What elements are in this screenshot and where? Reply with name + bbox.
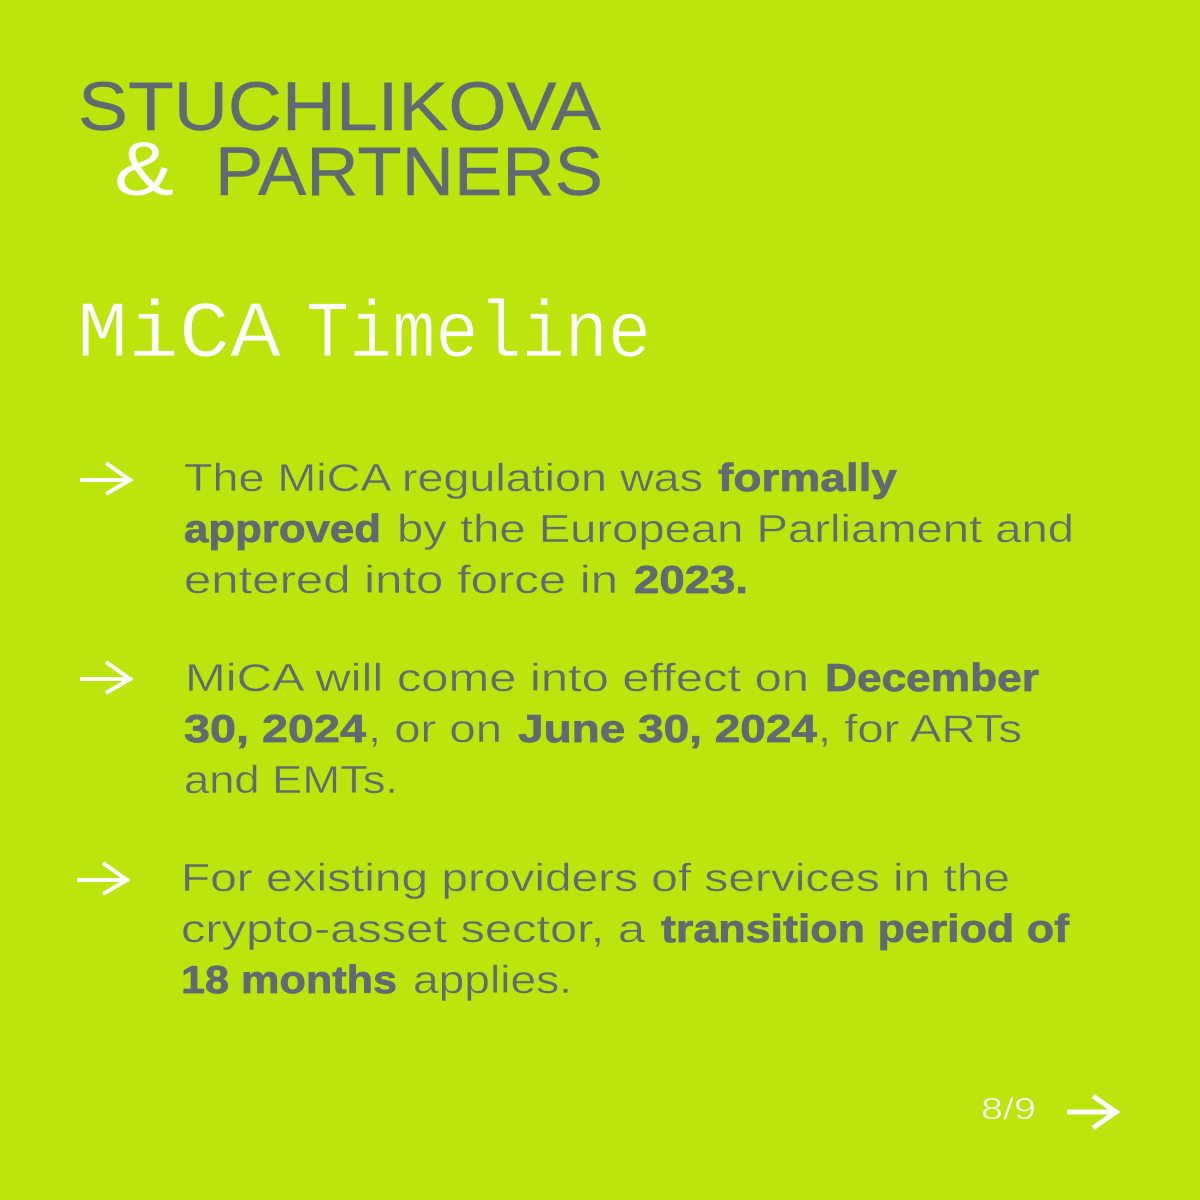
text block: transition period: crypto-asset sector, a <box>181 908 645 951</box>
logo word: Partners: PARTNERS <box>215 133 603 210</box>
title: MiCA <box>77 290 281 381</box>
text block: approval: formally <box>718 457 897 500</box>
text block: approval: 2023. <box>634 559 748 602</box>
text block: approval: approved <box>184 508 381 551</box>
text block: approval: by the European Parliament and <box>397 508 1074 551</box>
text block: approval: The MiCA regulation was <box>184 457 703 500</box>
text block: effective dates: , for ARTs <box>818 708 1022 751</box>
title: Timeline <box>306 290 651 381</box>
icon: arrow 2 <box>80 662 132 693</box>
text block: transition period: For existing providers of services in the <box>181 857 1010 900</box>
logo ampersand: & <box>114 127 174 212</box>
text block: transition period <box>181 857 1070 1002</box>
title <box>77 290 651 381</box>
text block: effective dates: MiCA will come into effect on <box>185 657 809 700</box>
text block: approval <box>184 457 1074 602</box>
logo word: Stuchlikova: STUCHLIKOVA <box>78 68 601 145</box>
page number: 8/9 <box>981 1091 1036 1126</box>
text block: transition period: transition period of <box>661 908 1070 951</box>
text block: effective dates: and EMTs. <box>184 759 398 802</box>
logo <box>78 68 603 212</box>
text block: transition period: 18 months <box>181 959 397 1002</box>
text block: transition period: applies. <box>413 959 572 1002</box>
icon: next arrow <box>1067 1096 1118 1128</box>
text block: effective dates: , or on <box>368 708 502 751</box>
text block: effective dates: 30, 2024 <box>184 708 366 751</box>
icon: arrow 1 <box>80 463 132 494</box>
text block: approval: entered into force in <box>184 559 618 602</box>
text block: effective dates: December <box>825 657 1039 700</box>
text block: effective dates: June 30, 2024 <box>518 708 817 751</box>
icon: arrow 3 <box>77 863 129 894</box>
text block: effective dates <box>184 657 1039 802</box>
